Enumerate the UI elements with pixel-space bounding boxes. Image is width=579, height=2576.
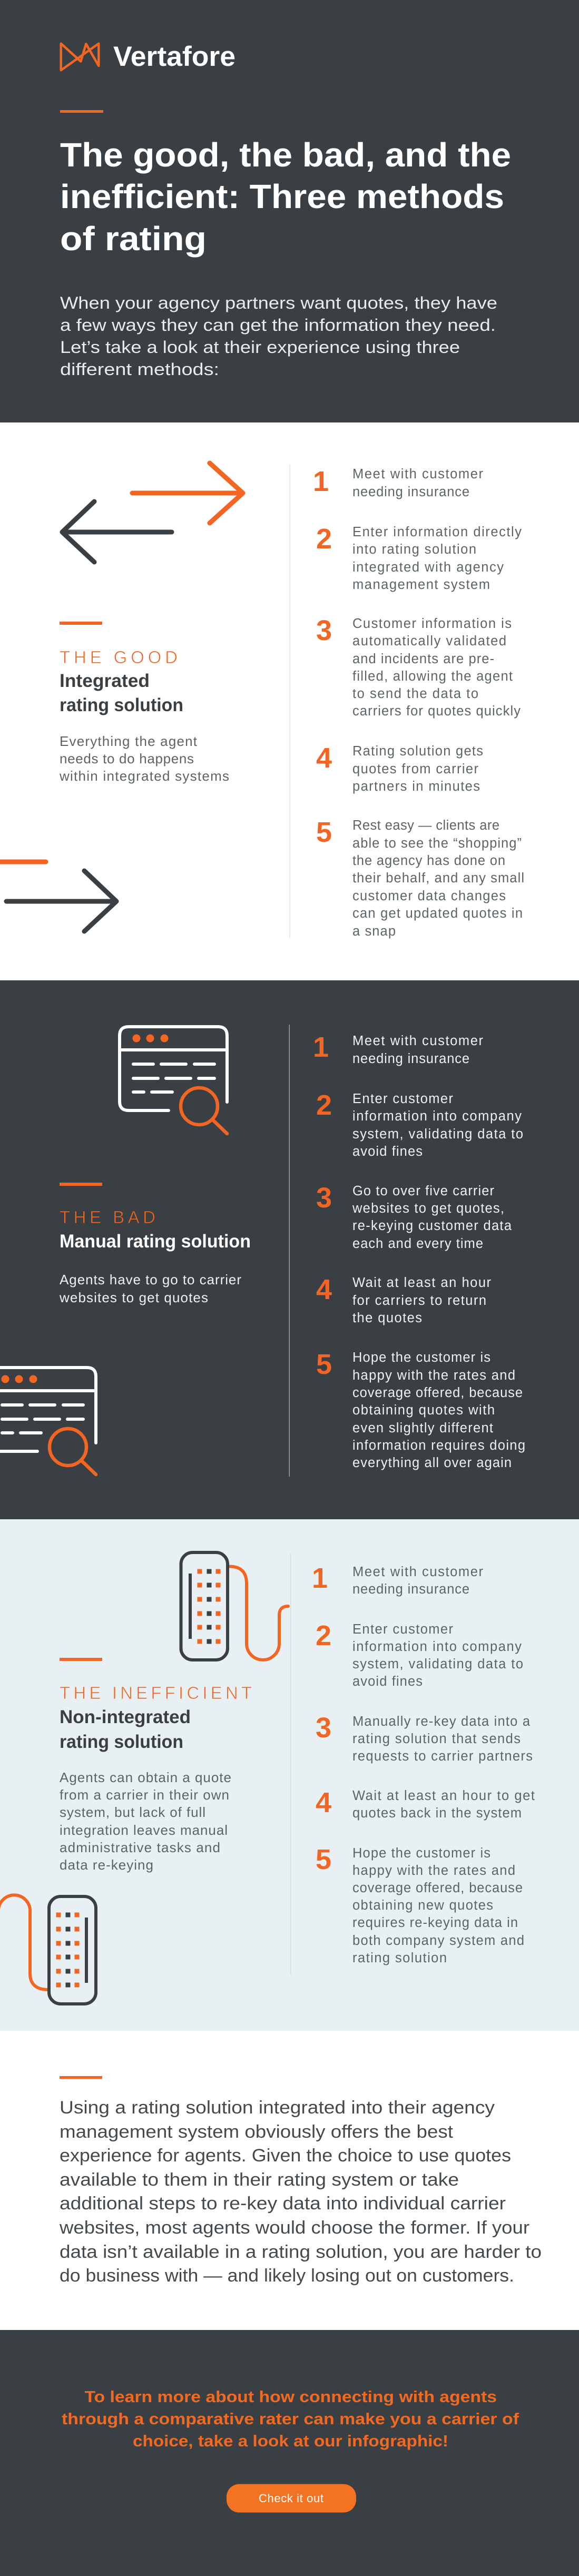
conclusion text: management system obviously offers the best (60, 2122, 454, 2142)
description: data re-keying (60, 1857, 153, 1873)
step 2 (316, 1089, 523, 1159)
step 5: the agency has done on (352, 853, 505, 868)
column rule (289, 1025, 290, 1477)
step 2: Enter customer (352, 1092, 453, 1106)
label: the bad: THE BAD (60, 1207, 155, 1227)
step 2: Enter customer (352, 1622, 453, 1637)
step 2: management system (352, 577, 490, 592)
step 3: carriers for quotes quickly (352, 704, 521, 719)
description: needs to do happens (60, 751, 194, 766)
step 5: can get updated quotes in (352, 906, 523, 921)
conclusion text: available to them in their rating system or take (60, 2170, 459, 2190)
description: Agents have to go to carrier (60, 1272, 241, 1287)
description (59, 733, 229, 784)
step 2: information into company (352, 1639, 522, 1654)
step 3: automatically validated (352, 634, 506, 648)
description (60, 1769, 231, 1873)
step 5: both company system and (352, 1933, 524, 1948)
intro text: different methods: (60, 360, 219, 379)
subheading: Integrated (60, 671, 150, 691)
conclusion text: websites, most agents would choose the former. If your (59, 2218, 529, 2238)
description (59, 1272, 241, 1305)
step 1: needing insurance (352, 485, 469, 499)
step 1: needing insurance (352, 1051, 469, 1066)
conclusion text: Using a rating solution integrated into their agency (60, 2098, 495, 2118)
label: the good: THE GOOD (60, 647, 178, 667)
step 3: 3 (316, 1182, 332, 1214)
step 3: Go to over five carrier (352, 1184, 494, 1198)
icon: orange right arrow (132, 463, 243, 523)
step 5: obtaining new quotes (352, 1898, 493, 1913)
step 3: Customer information is (352, 616, 512, 631)
step 3: requests to carrier partners (352, 1749, 533, 1764)
subheading: Manual rating solution (60, 1231, 251, 1252)
step 5: 5 (316, 1844, 331, 1875)
subheading: Non-integrated (60, 1707, 191, 1727)
step 4 (316, 742, 483, 794)
intro text: Let’s take a look at their experience using three (60, 338, 460, 357)
conclusion text: do business with — and likely losing out on customers. (60, 2266, 514, 2286)
step 2: avoid fines (352, 1674, 423, 1689)
accent bar (60, 622, 102, 625)
step 1: 1 (313, 1031, 329, 1063)
step 5 (316, 817, 524, 939)
description: within integrated systems (59, 768, 229, 784)
label: the inefficient: THE INEFFICIENT (60, 1683, 252, 1703)
step 3: 3 (316, 615, 332, 646)
step 1: Meet with customer (352, 1034, 484, 1048)
intro text: a few ways they can get the information they need. (60, 316, 496, 335)
description: from a carrier in their own (60, 1787, 229, 1803)
step 4: Wait at least an hour to get (352, 1788, 535, 1803)
button: check it out: Check it out (259, 2492, 323, 2505)
step 1 (313, 1031, 484, 1066)
button: check it out (227, 2484, 356, 2513)
step 5: happy with the rates and (352, 1863, 515, 1878)
steps list (313, 1031, 525, 1470)
step 5: everything all over again (352, 1456, 512, 1470)
step 1 (312, 1562, 484, 1597)
step 4: 4 (316, 1274, 332, 1305)
step 5: able to see the “shopping” (352, 836, 522, 851)
panel: call to action (0, 2330, 579, 2576)
icon: device with cable (181, 1552, 288, 1660)
subheading: rating solution (60, 1732, 183, 1752)
conclusion text: additional steps to re-key data into individual carrier (60, 2194, 506, 2214)
step 4: the quotes (352, 1311, 422, 1325)
step 2: 2 (316, 1089, 332, 1121)
subheading (60, 671, 183, 715)
step 1: 1 (312, 1562, 328, 1594)
accent bar (60, 1658, 102, 1661)
step 3: websites to get quotes, (352, 1201, 504, 1216)
icon: Vertafore logo mark (61, 44, 99, 70)
call to action text: through a comparative rater can make you a carrier of (62, 2410, 519, 2428)
icon: bottom orange dash (0, 860, 46, 864)
step 5: coverage offered, because (352, 1385, 523, 1400)
description: administrative tasks and (60, 1840, 220, 1855)
icon: browser window with magnifier (120, 1027, 227, 1134)
step 4: quotes back in the system (352, 1806, 522, 1821)
step 3: and incidents are pre- (352, 652, 494, 666)
step 2: 2 (316, 523, 332, 555)
step 3 (316, 1712, 533, 1764)
step 1 (313, 466, 484, 499)
step 2: integrated with agency (352, 560, 504, 575)
step 1: Meet with customer (352, 467, 484, 481)
step 5: 5 (316, 1349, 332, 1380)
description: websites to get quotes (59, 1290, 208, 1305)
panel: the good (0, 422, 579, 980)
accent bar (60, 110, 103, 113)
step 3: to send the data to (352, 686, 478, 701)
description: Everything the agent (60, 733, 198, 749)
description: integration leaves manual (60, 1822, 228, 1838)
icon: cropped browser window with magnifier (0, 1368, 96, 1474)
accent bar (60, 1183, 102, 1186)
step 3: each and every time (352, 1236, 483, 1251)
conclusion text (59, 2098, 542, 2286)
call to action text: To learn more about how connecting with agents (84, 2387, 497, 2406)
step 4 (316, 1274, 491, 1325)
accent bar (60, 2076, 102, 2079)
step 2 (316, 1620, 523, 1689)
step 4: for carriers to return (352, 1293, 486, 1308)
intro text: When your agency partners want quotes, they have (60, 293, 497, 312)
panel: conclusion (0, 2031, 579, 2330)
column rule (290, 1554, 291, 1974)
title: The good, the bad, and the (60, 136, 511, 174)
step 4: partners in minutes (352, 779, 480, 794)
step 5: customer data changes (352, 889, 506, 903)
step 1: needing insurance (352, 1582, 469, 1597)
step 4: 4 (316, 742, 332, 774)
step 4: Rating solution gets (352, 744, 483, 759)
panel: the inefficient (0, 1519, 579, 2031)
step 2: avoid fines (352, 1144, 423, 1159)
step 5: even slightly different (352, 1421, 493, 1436)
step 2: information into company (352, 1109, 522, 1124)
icon: dark left arrow (62, 502, 172, 562)
step 2: 2 (316, 1620, 331, 1651)
step 5: coverage offered, because (352, 1881, 523, 1895)
step 5: obtaining quotes with (352, 1403, 495, 1418)
call to action text (62, 2387, 519, 2450)
step 3 (316, 1182, 512, 1251)
conclusion text: data isn’t available in a rating solution, you are harder to (60, 2242, 542, 2262)
step 2: Enter information directly (352, 525, 522, 539)
title: inefficient: Three methods (60, 178, 504, 215)
call to action text: choice, take a look at our infographic! (133, 2432, 448, 2450)
intro text (60, 293, 497, 379)
step 1: Meet with customer (352, 1565, 484, 1579)
title (60, 136, 511, 258)
step 3: re-keying customer data (352, 1218, 512, 1233)
steps list (313, 466, 524, 939)
logo wordmark: Vertafore (113, 41, 235, 72)
step 4 (316, 1787, 535, 1821)
step 2: system, validating data to (352, 1127, 523, 1142)
panel: header (0, 0, 579, 422)
step 5: a snap (352, 924, 396, 939)
subheading: rating solution (60, 695, 183, 715)
step 2: into rating solution (352, 542, 476, 557)
icon: bottom dark right arrow (6, 871, 116, 931)
step 5: happy with the rates and (352, 1368, 515, 1383)
conclusion text: experience for agents. Given the choice to use quotes (60, 2146, 511, 2166)
step 4: Wait at least an hour (352, 1275, 491, 1290)
step 3: filled, allowing the agent (352, 669, 513, 684)
step 1: 1 (313, 466, 329, 497)
step 2: system, validating data to (352, 1657, 523, 1672)
step 5: rating solution (352, 1951, 447, 1965)
step 5 (316, 1349, 525, 1470)
step 5 (316, 1844, 524, 1965)
step 5: 5 (316, 817, 332, 848)
icon: cropped device with cable (0, 1895, 96, 2004)
step 5: Hope the customer is (352, 1350, 490, 1365)
step 4: quotes from carrier (352, 762, 478, 776)
step 5: requires re-keying data in (352, 1915, 518, 1930)
title: of rating (60, 220, 207, 258)
steps list (312, 1562, 535, 1965)
step 3: rating solution that sends (352, 1732, 521, 1746)
step 5: Rest easy — clients are (352, 818, 499, 833)
description: Agents can obtain a quote (60, 1769, 231, 1785)
step 3: 3 (316, 1712, 331, 1744)
step 3 (316, 615, 521, 719)
step 3: Manually re-key data into a (352, 1714, 531, 1729)
step 5: Hope the customer is (352, 1846, 490, 1861)
subheading (60, 1707, 191, 1752)
panel: the bad (0, 980, 579, 1519)
description: system, but lack of full (60, 1804, 205, 1820)
step 5: their behalf, and any small (352, 871, 524, 886)
step 2 (316, 523, 522, 592)
step 4: 4 (316, 1787, 331, 1818)
step 5: information requires doing (352, 1438, 525, 1453)
